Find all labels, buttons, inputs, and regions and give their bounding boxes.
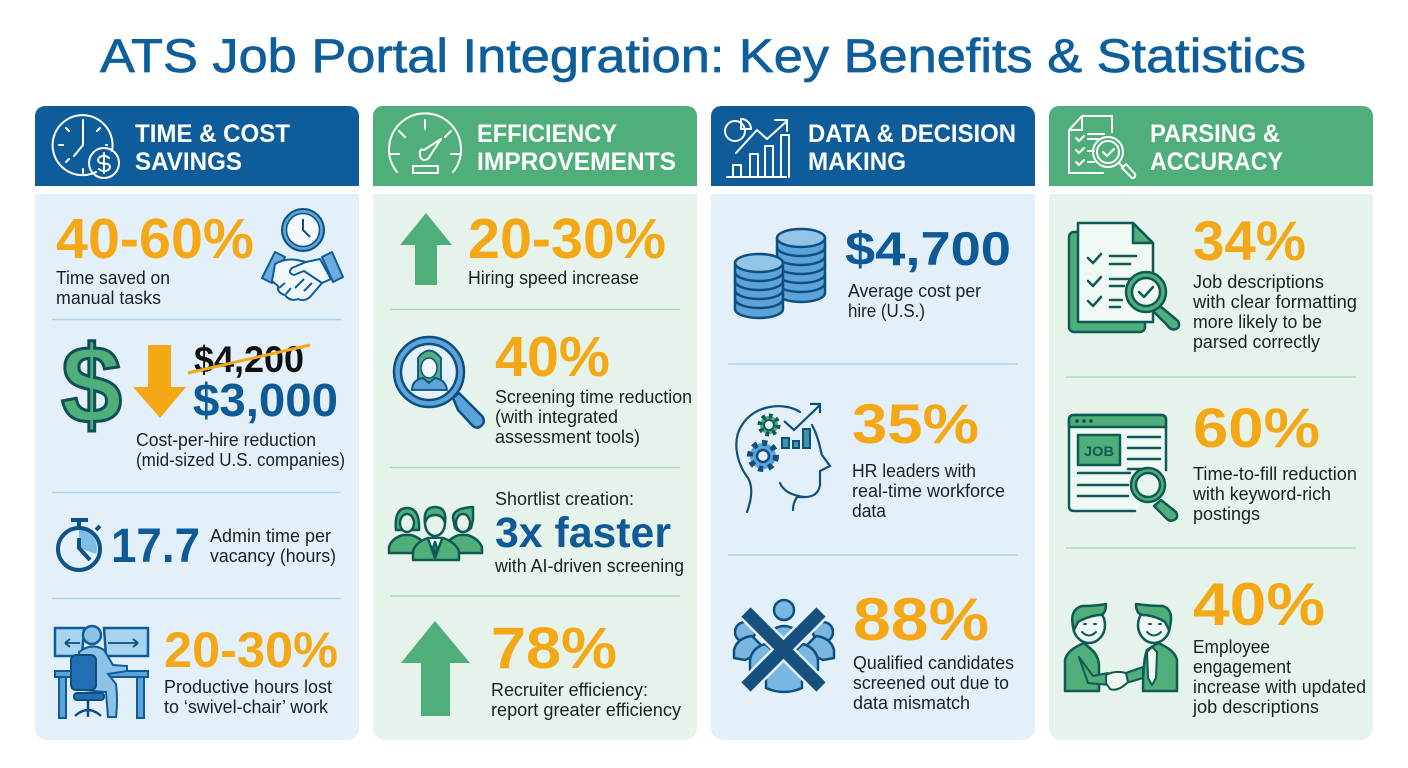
stat: 40-60% time saved: Time saved on <box>56 268 170 288</box>
stat: 78% recruiter efficiency: report greater efficiency <box>491 700 681 720</box>
stat: 40% screening time: assessment tools) <box>495 427 640 447</box>
stat: cost per hire reduction <box>136 339 345 470</box>
icon: chart with pie and arrow <box>725 119 789 177</box>
header text: EFFICIENCY <box>477 120 617 148</box>
stat: 40-60% time saved <box>56 207 254 308</box>
stat: 34% job descriptions <box>1192 209 1357 352</box>
icon: clock with dollar <box>53 115 119 178</box>
stat: 40% screening time <box>495 325 692 447</box>
stat: 40% employee engagement: job descriptions <box>1192 697 1319 717</box>
icon: green dollar sign: $ <box>61 324 122 447</box>
stat: 20-30% productive hours: Productive hours lost <box>164 677 332 697</box>
header text: IMPROVEMENTS <box>477 148 676 176</box>
stat: shortlist 3x faster <box>494 489 684 576</box>
stat: 60% time to fill <box>1192 396 1357 524</box>
stat: 40% screening time: (with integrated <box>495 407 618 427</box>
stat: 20-30% productive hours: 20-30% <box>164 622 338 678</box>
stat: 20-30% hiring speed: 20-30% <box>468 207 666 271</box>
stat: 40% employee engagement: 40% <box>1193 571 1325 638</box>
stat: 40% employee engagement <box>1192 571 1366 717</box>
stat: 60% time to fill: Time-to-fill reduction <box>1193 464 1357 484</box>
icon: orange down arrow <box>133 345 186 418</box>
stat: 40-60% time saved: manual tasks <box>56 288 161 308</box>
stat: 20-30% hiring speed: Hiring speed increase <box>468 268 639 288</box>
icon: swivel-chair worker <box>55 626 148 718</box>
stat: 60% time to fill: postings <box>1193 504 1260 524</box>
stat: $4,700 average cost: hire (U.S.) <box>848 301 925 321</box>
stat: shortlist 3x faster: 3x faster <box>495 509 671 557</box>
title: ATS Job Portal Integration: Key Benefits & Statistics <box>100 29 1306 82</box>
icon: candidates group <box>389 507 482 560</box>
stat: 34% job descriptions: more likely to be <box>1193 312 1322 332</box>
panel: time and cost savings <box>35 106 359 740</box>
stat: 34% job descriptions: Job descriptions <box>1193 272 1324 292</box>
stat: 35% HR leaders: HR leaders with <box>852 461 976 481</box>
stat: 88% qualified candidates: 88% <box>853 586 989 653</box>
stat: 20-30% productive hours: to ‘swivel-chair’ work <box>164 697 329 717</box>
stat: cost per hire reduction: Cost-per-hire reduction <box>136 430 316 450</box>
header text: MAKING <box>808 148 906 176</box>
icon: up arrow <box>400 213 452 285</box>
stat: 17.7 admin time: 17.7 <box>111 520 200 573</box>
stat: 78% recruiter efficiency <box>491 616 681 720</box>
icon: smiling colleagues shaking hands <box>1065 604 1177 691</box>
icon: clock and handshake <box>262 209 343 300</box>
panel header: data and decision making <box>711 106 1035 186</box>
icon: coin stacks <box>735 229 825 318</box>
stat: 88% qualified candidates <box>853 586 1014 713</box>
icon: job posting window: JOB <box>1084 443 1114 459</box>
stat: $4,700 average cost: $4,700 <box>845 222 1011 275</box>
panel header: efficiency improvements <box>373 106 697 186</box>
stat: 17.7 admin time: Admin time per <box>210 526 331 546</box>
panel: parsing and accuracy <box>1049 106 1373 740</box>
stat: 40-60% time saved: 40-60% <box>56 207 254 271</box>
stat: 78% recruiter efficiency: 78% <box>491 616 617 681</box>
header text <box>135 120 290 176</box>
stat: shortlist 3x faster: Shortlist creation: <box>495 489 634 509</box>
stat: 20-30% productive hours <box>164 622 338 717</box>
header text: ACCURACY <box>1150 148 1283 176</box>
stat: 60% time to fill: 60% <box>1193 396 1320 459</box>
stat: 34% job descriptions: 34% <box>1193 209 1306 272</box>
icon: magnifier with candidate <box>394 337 484 428</box>
icon: document with magnifier <box>1069 116 1135 178</box>
panel: efficiency improvements <box>373 106 697 740</box>
stat: 88% qualified candidates: Qualified candidates <box>853 653 1014 673</box>
stat: 35% HR leaders: 35% <box>852 392 979 455</box>
stat: 17.7 admin time <box>111 520 336 573</box>
panel header: parsing and accuracy <box>1049 106 1373 186</box>
stat: 40% employee engagement: engagement <box>1193 657 1291 677</box>
stat: 40% screening time: Screening time reduction <box>495 387 692 407</box>
stat: 40% employee engagement: increase with updated <box>1193 677 1366 697</box>
stat: 40% screening time: 40% <box>495 325 610 389</box>
header text <box>1150 120 1283 176</box>
icon: large up arrow <box>401 621 470 716</box>
stat: 88% qualified candidates: data mismatch <box>853 693 970 713</box>
header text: DATA & DECISION <box>808 120 1016 148</box>
icon: stopwatch <box>58 520 100 570</box>
header text <box>808 120 1016 176</box>
panel: data and decision making <box>711 106 1035 740</box>
icon: speedometer <box>389 113 461 173</box>
icon: head with gears and chart <box>736 404 830 512</box>
stat: 60% time to fill: with keyword-rich <box>1192 484 1331 504</box>
stat: 34% job descriptions: parsed correctly <box>1193 332 1320 352</box>
stat: 17.7 admin time: vacancy (hours) <box>210 546 336 566</box>
header text <box>477 120 676 176</box>
stat: 78% recruiter efficiency: Recruiter efficiency: <box>491 680 648 700</box>
header text: TIME & COST <box>135 120 290 148</box>
header text: SAVINGS <box>135 148 242 176</box>
stat: 35% HR leaders <box>852 392 1005 521</box>
stat: $4,700 average cost <box>845 222 1011 321</box>
stat: 88% qualified candidates: screened out due to <box>853 673 1009 693</box>
header text: PARSING & <box>1150 120 1280 148</box>
icon: crossed-out candidates <box>734 600 834 692</box>
stat: cost per hire reduction: $4,200 <box>194 339 304 380</box>
stat: 35% HR leaders: data <box>852 501 887 521</box>
stat: shortlist 3x faster: with AI-driven screening <box>494 556 684 576</box>
stat: 34% job descriptions: with clear formatting <box>1192 292 1357 312</box>
stat: 40% employee engagement: Employee <box>1193 637 1270 657</box>
stat: 35% HR leaders: real-time workforce <box>852 481 1005 501</box>
stat: cost per hire reduction: $3,000 <box>193 374 338 426</box>
icon: job posting window <box>1069 415 1177 521</box>
panel header: time and cost savings <box>35 106 359 186</box>
icon: checklist document with magnifier <box>1069 223 1179 332</box>
stat: cost per hire reduction: (mid-sized U.S. companies) <box>136 450 345 470</box>
stat: $4,700 average cost: Average cost per <box>848 281 981 301</box>
